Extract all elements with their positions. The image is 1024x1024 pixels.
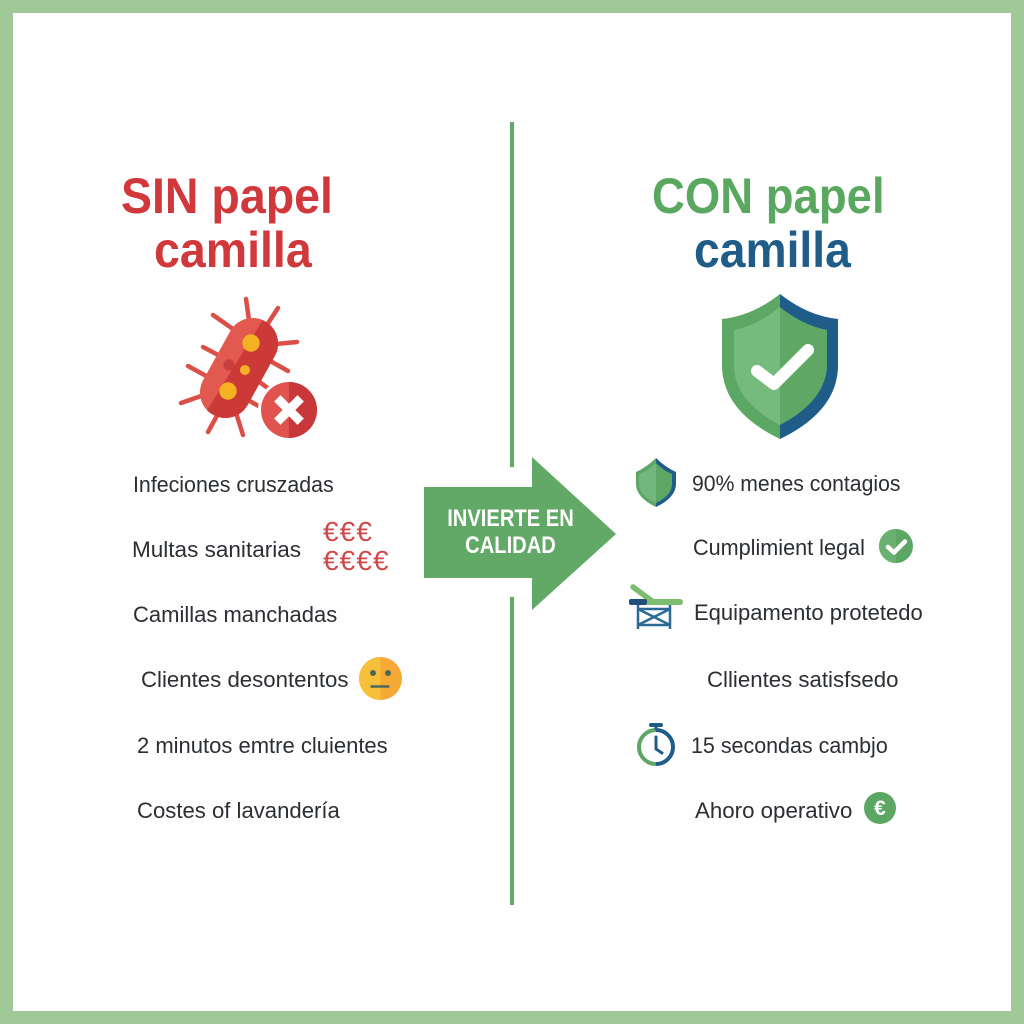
icon: massage table: [629, 584, 683, 629]
arrow: invierte en calidad: [424, 457, 616, 610]
icon: check circle: [879, 529, 913, 563]
heading: con papel camilla: camilla: [694, 222, 851, 278]
heading: con papel camilla: [652, 168, 885, 278]
item: cumplimient: Cumplimient legal: [693, 535, 865, 560]
arrow: invierte en calidad: INVIERTE EN: [447, 505, 574, 532]
icon: euro circle: €: [874, 797, 886, 820]
item: 90%: 90% menes contagios: [692, 471, 900, 496]
icon: large shield: [722, 294, 838, 439]
heading: con papel camilla: CON papel: [652, 168, 885, 224]
item: costes: Costes of lavandería: [137, 798, 340, 823]
left list: [132, 472, 402, 823]
icon: small shield: [636, 458, 676, 507]
heading: sin papel camilla: SIN papel: [121, 168, 333, 224]
item: equipamento: Equipamento protetedo: [694, 600, 923, 625]
icon: euros: [323, 516, 390, 576]
item: infeciones: Infeciones cruszadas: [133, 472, 334, 497]
item: 2 minutos: 2 minutos emtre cluientes: [137, 733, 388, 758]
item: clientes satisfsedo: Cllientes satisfsedo: [707, 667, 898, 692]
item: 15 secondas: 15 secondas cambjo: [691, 733, 888, 758]
item: clientes: Clientes desontentos: [141, 667, 349, 692]
arrow: invierte en calidad: CALIDAD: [465, 532, 556, 559]
heading: sin papel camilla: [121, 168, 333, 278]
icon: euros: €€€€: [323, 545, 390, 576]
icon: neutral face: [359, 657, 402, 700]
icon: euro circle: [864, 792, 896, 824]
item: multas: Multas sanitarias: [132, 537, 301, 562]
divider line bottom: [510, 597, 514, 905]
icon: bacteria with x: [178, 296, 317, 438]
right list: [629, 458, 923, 824]
divider line top: [510, 122, 514, 467]
icon: stopwatch: [637, 723, 675, 766]
item: ahoro: Ahoro operativo: [695, 798, 852, 823]
item: camillas: Camillas manchadas: [133, 602, 337, 627]
icon: euros: €€€: [323, 516, 373, 547]
heading: sin papel camilla: camilla: [154, 222, 312, 278]
